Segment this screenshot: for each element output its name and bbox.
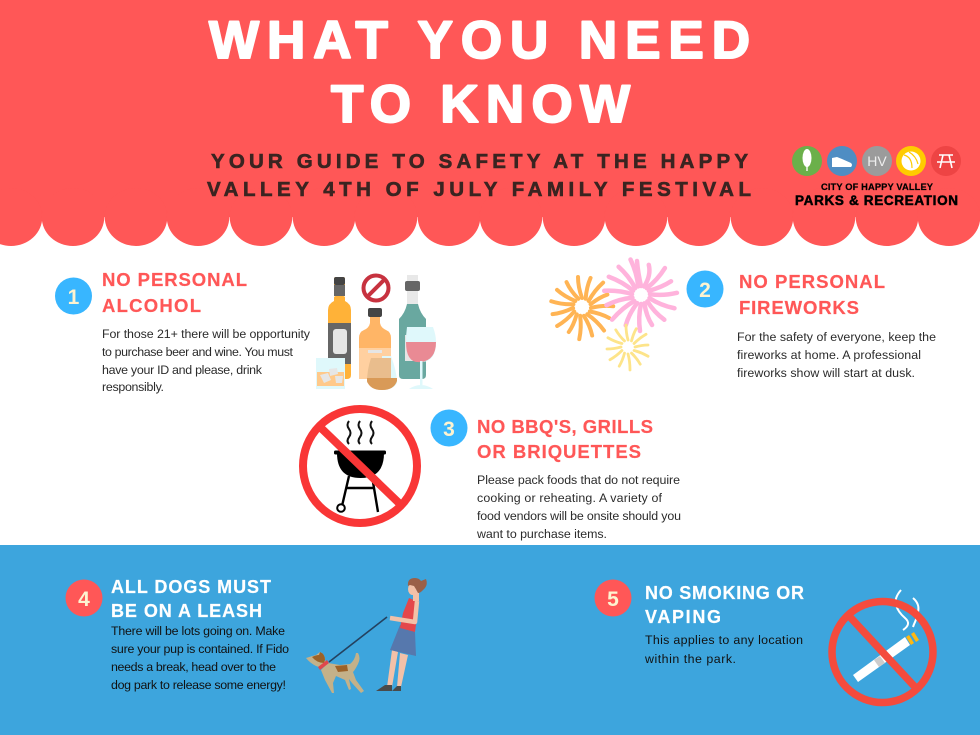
text 2: For the safety of everyone, keep the bbox=[737, 330, 936, 344]
grill bbox=[334, 450, 386, 512]
icon: picnic table bbox=[931, 146, 961, 176]
panel: item 2 no personal fireworks bbox=[551, 259, 936, 380]
dog bbox=[306, 652, 364, 693]
heading 2: FIREWORKS bbox=[739, 297, 859, 318]
text 3: food vendors will be onsite should you bbox=[477, 509, 681, 523]
text 4 bbox=[111, 624, 289, 692]
text 1: to purchase beer and wine. You must bbox=[102, 345, 294, 359]
number badge 1: 1 bbox=[68, 286, 80, 309]
heading 4: ALL DOGS MUST bbox=[111, 577, 271, 597]
icon: softball bbox=[896, 146, 926, 176]
text 2: fireworks at home. A professional bbox=[737, 348, 921, 362]
number badge 5 bbox=[594, 580, 632, 616]
number badge 4: 4 bbox=[78, 588, 90, 611]
number badge 4 bbox=[66, 580, 102, 616]
heading 5: NO SMOKING OR bbox=[645, 583, 804, 603]
smoke bbox=[896, 590, 918, 630]
warning sign bbox=[364, 276, 388, 300]
heading 4: BE ON A LEASH bbox=[111, 601, 262, 621]
wine glass bbox=[406, 327, 436, 389]
icon: shoe bbox=[827, 146, 857, 176]
heading 3: NO BBQ'S, GRILLS bbox=[477, 416, 653, 437]
icon: no grill bbox=[303, 409, 417, 523]
panel: item 4 dogs on a leash bbox=[66, 577, 427, 693]
header banner with scalloped edge bbox=[0, 0, 980, 246]
text 5: This applies to any location bbox=[645, 633, 803, 647]
logo: City of Happy Valley Parks and Recreation bbox=[792, 146, 961, 208]
heading 3 bbox=[477, 416, 653, 462]
text 4: needs a break, head over to the bbox=[111, 660, 276, 674]
title bbox=[209, 11, 750, 134]
icon: HV monogram: HV bbox=[867, 153, 887, 169]
heading 1: NO PERSONAL bbox=[102, 269, 247, 290]
number badge 1 bbox=[55, 278, 92, 314]
number badge 5: 5 bbox=[607, 588, 619, 611]
prohibition ring bbox=[832, 602, 933, 702]
text 1: For those 21+ there will be opportunity bbox=[102, 327, 311, 341]
heading 5 bbox=[645, 583, 804, 627]
pink burst bbox=[604, 259, 677, 331]
number badge 3: 3 bbox=[443, 418, 455, 441]
text 5: within the park. bbox=[644, 652, 736, 666]
text 1: have your ID and please, drink bbox=[102, 363, 263, 377]
heading 5: VAPING bbox=[645, 607, 721, 627]
number badge 2 bbox=[686, 270, 724, 308]
heading 3: OR BRIQUETTES bbox=[477, 441, 641, 462]
icon: alcohol bottles bbox=[316, 275, 436, 390]
icon: tree bbox=[792, 146, 822, 176]
logo text bbox=[795, 182, 958, 208]
text 4: There will be lots going on. Make bbox=[111, 624, 285, 638]
smoke bbox=[348, 421, 374, 444]
number badge 3 bbox=[430, 410, 468, 446]
cigarette bbox=[853, 632, 919, 682]
panel: item 5 no smoking bbox=[594, 580, 933, 702]
icon: HV monogram bbox=[862, 146, 892, 176]
icon: no smoking bbox=[832, 590, 933, 702]
orange burst bbox=[551, 277, 613, 339]
text 1 bbox=[102, 327, 311, 394]
heading 2: NO PERSONAL bbox=[739, 271, 885, 292]
yellow burst bbox=[607, 325, 648, 370]
text 4: sure your pup is contained. If Fido bbox=[111, 642, 289, 656]
icon: fireworks bbox=[551, 259, 677, 370]
leash bbox=[329, 617, 387, 662]
panel: item 3 no bbq bbox=[303, 409, 681, 541]
icon: woman walking dog bbox=[306, 578, 427, 693]
logo text: PARKS & RECREATION bbox=[795, 193, 958, 208]
heading 1 bbox=[102, 269, 247, 316]
heading 4 bbox=[111, 577, 271, 621]
subtitle bbox=[207, 150, 751, 201]
text 3: Please pack foods that do not require bbox=[477, 473, 680, 487]
title: TO KNOW bbox=[331, 75, 630, 134]
heading 2 bbox=[739, 271, 885, 318]
text 2 bbox=[737, 330, 936, 380]
subtitle: YOUR GUIDE TO SAFETY AT THE HAPPY bbox=[211, 150, 748, 173]
bottle 1 bbox=[328, 277, 351, 379]
text 3 bbox=[476, 473, 681, 541]
panel: item 1 no personal alcohol bbox=[55, 269, 436, 394]
bottle 2 bbox=[359, 308, 391, 379]
logo text: CITY OF HAPPY VALLEY bbox=[821, 182, 934, 192]
woman bbox=[376, 578, 427, 691]
subtitle: VALLEY 4TH OF JULY FAMILY FESTIVAL bbox=[207, 178, 751, 201]
text 5 bbox=[644, 633, 803, 666]
text 4: dog park to release some energy! bbox=[111, 678, 286, 692]
text 1: responsibly. bbox=[102, 380, 164, 394]
panel: blue footer bbox=[0, 545, 980, 735]
prohibition ring bbox=[303, 409, 417, 523]
whisky glass bbox=[316, 358, 345, 389]
snifter bbox=[367, 356, 397, 390]
text 2: fireworks show will start at dusk. bbox=[737, 366, 915, 380]
text 3: cooking or reheating. A variety of bbox=[477, 491, 663, 505]
heading 1: ALCOHOL bbox=[102, 295, 201, 316]
title: WHAT YOU NEED bbox=[209, 11, 750, 70]
bottle 3 bbox=[399, 275, 426, 379]
text 3: want to purchase items. bbox=[476, 527, 607, 541]
number badge 2: 2 bbox=[699, 279, 711, 302]
